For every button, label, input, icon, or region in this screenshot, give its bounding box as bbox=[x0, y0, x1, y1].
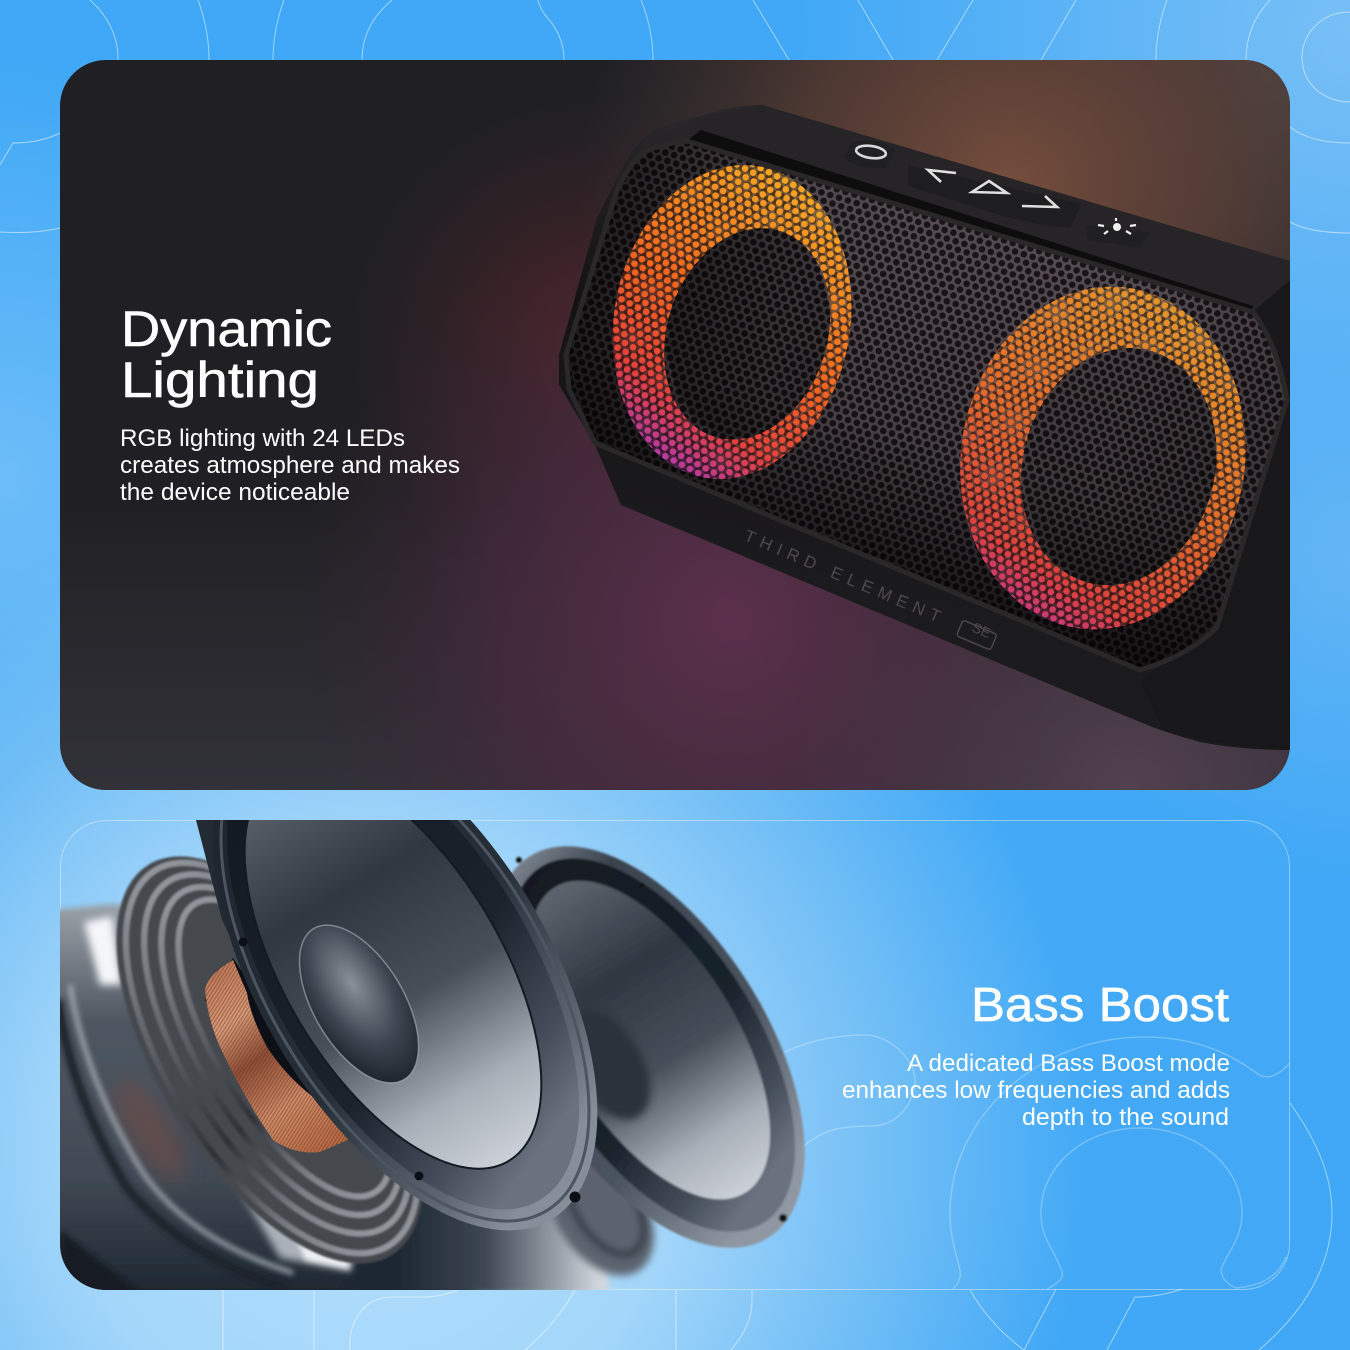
description: dynamic lighting bbox=[120, 428, 460, 500]
dust cap bbox=[298, 924, 420, 1084]
description: dynamic lighting: the device noticeable bbox=[120, 479, 350, 506]
dark lower shadow bbox=[346, 1200, 612, 1290]
heading: dynamic lighting: Dynamic bbox=[121, 301, 332, 357]
panel line decoration bbox=[775, 1035, 1290, 1289]
left light ring bbox=[612, 165, 852, 479]
description: bass boost: enhances low frequencies and adds bbox=[842, 1077, 1230, 1104]
brand label: THIRD ELEMENT bbox=[741, 526, 949, 629]
panel glass bbox=[60, 820, 1290, 1290]
panel: dynamic lighting bbox=[60, 60, 1295, 790]
panel: bass boost bbox=[60, 820, 1290, 1290]
heading: dynamic lighting: Lighting bbox=[121, 352, 319, 408]
heading: bass boost: Bass Boost bbox=[971, 979, 1229, 1032]
speaker body bbox=[559, 105, 1290, 750]
dark gap behind coil bbox=[205, 958, 312, 1096]
rubber surround bbox=[227, 820, 579, 1210]
panel background bbox=[60, 60, 1290, 790]
speaker product bbox=[550, 105, 1295, 750]
description: bass boost bbox=[842, 1050, 1230, 1131]
top band bbox=[762, 105, 1282, 259]
description: dynamic lighting: RGB lighting with 24 LEDs bbox=[120, 425, 405, 452]
heading: dynamic lighting bbox=[121, 301, 332, 408]
rear magnet assembly bbox=[50, 904, 480, 1300]
frame bbox=[228, 820, 598, 1230]
speaker grille bbox=[550, 130, 1295, 680]
right light ring bbox=[960, 286, 1246, 630]
light rim bbox=[220, 820, 590, 1223]
copper voice coil bbox=[205, 960, 352, 1152]
right end cap bbox=[1255, 280, 1290, 750]
description: bass boost: A dedicated Bass Boost mode bbox=[907, 1050, 1230, 1077]
description: bass boost: depth to the sound bbox=[1022, 1104, 1229, 1131]
grille rim bbox=[566, 141, 1287, 670]
front woofer bbox=[196, 820, 598, 1230]
rear fabric spider bbox=[550, 1164, 660, 1282]
description: dynamic lighting: creates atmosphere and makes bbox=[120, 452, 460, 479]
back woofer bbox=[511, 844, 806, 1249]
frame top patch bbox=[196, 820, 228, 933]
brand label: SE bbox=[970, 619, 993, 641]
control buttons bbox=[854, 144, 1136, 235]
fabric spider bbox=[115, 854, 422, 1264]
brand label bbox=[741, 526, 997, 650]
mounting holes bbox=[238, 938, 580, 1202]
cone bbox=[246, 820, 542, 1170]
